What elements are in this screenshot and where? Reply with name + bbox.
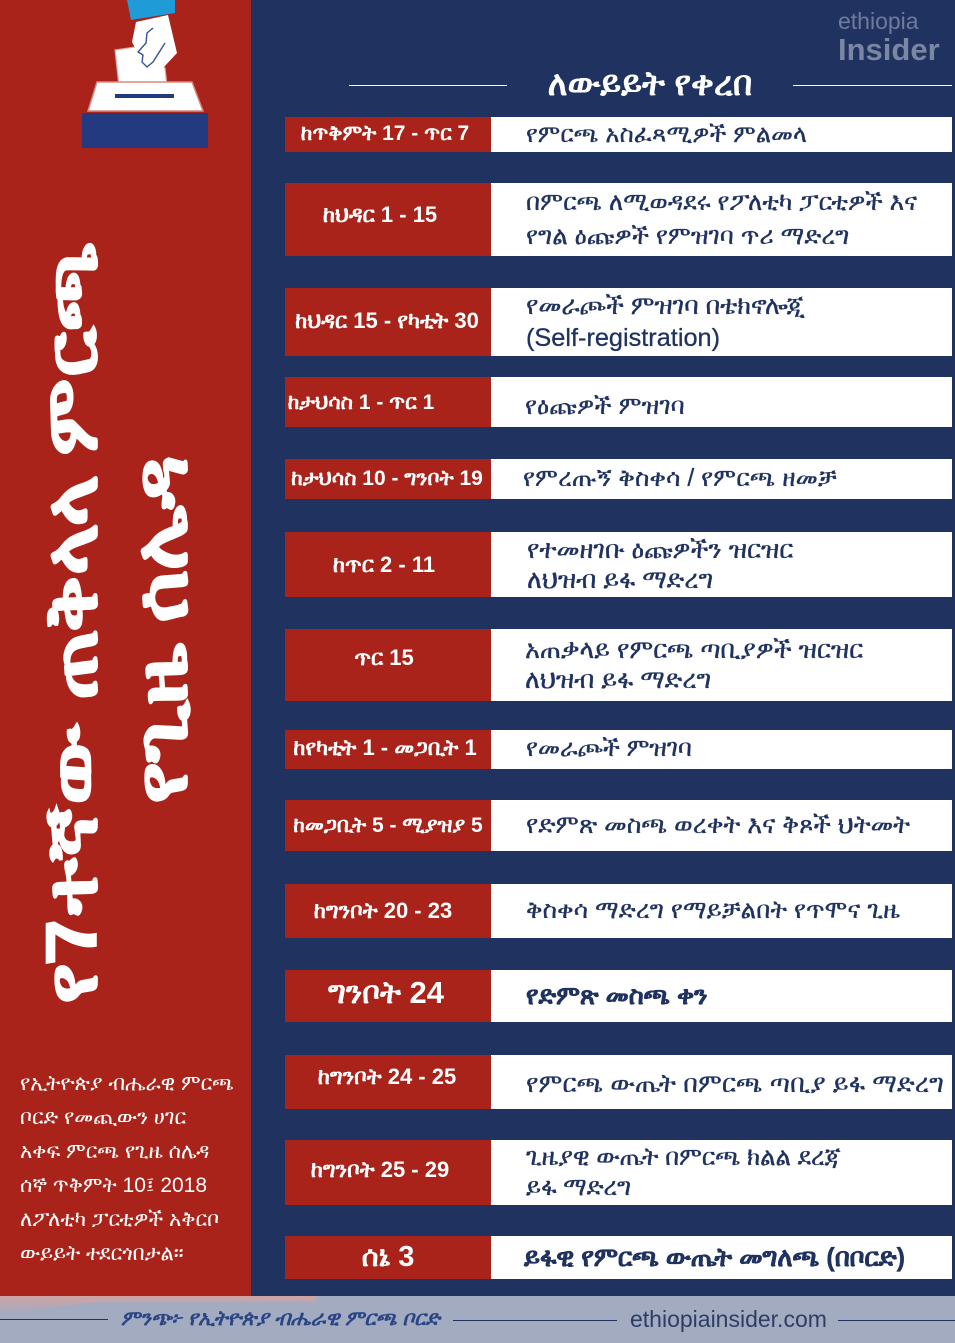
row 1: የምርጫ አስፈጻሚዎች ምልመላ	[526, 120, 807, 148]
row 3: (Self-registration)	[526, 324, 720, 352]
logo: ethiopia Insider: Insider	[838, 32, 940, 67]
row 1: ከጥቅምት 17 - ጥር 7	[301, 122, 469, 144]
row 7: አጠቃላይ የምርጫ ጣቢያዎች ዝርዝር	[525, 636, 863, 664]
footer	[0, 1296, 955, 1343]
row 6: የተመዘገቡ ዕጩዎችን ዝርዝር	[527, 536, 793, 564]
logo: ethiopia Insider	[838, 8, 940, 67]
row 14: ይፋዊ የምርጫ ውጤት መግለጫ (በቦርድ)	[524, 1244, 905, 1272]
row 4	[285, 377, 952, 427]
row 3: ከህዳር 15 - የካቲት 30	[295, 308, 479, 333]
row 5: የምረጡኝ ቅስቀሳ / የምርጫ ዘመቻ	[523, 465, 837, 492]
source text: ምንጭ፦ የኢትዮጵያ ብሔራዊ ምርጫ ቦርድ	[121, 1307, 440, 1330]
row 14: ሰኔ 3	[362, 1241, 414, 1273]
row 2: የግል ዕጩዎች የምዝገባ ጥሪ ማድረግ	[526, 222, 849, 250]
row 3	[285, 288, 952, 356]
row 10	[285, 884, 952, 938]
row 8	[285, 730, 952, 769]
text block: intro: አቀፍ ምርጫ የጊዜ ሰሌዳ	[20, 1140, 209, 1163]
row 4: ከታህሳስ 1 - ጥር 1	[288, 391, 434, 414]
row 8: የመራጮች ምዝገባ	[526, 734, 692, 762]
row 9: ከመጋቢት 5 - ሚያዝያ 5	[293, 814, 483, 836]
row 4: የዕጩዎች ምዝገባ	[525, 393, 685, 420]
row 10: ከግንቦት 20 - 23	[314, 898, 452, 923]
row 11	[285, 970, 952, 1022]
row 7: ጥር 15	[354, 645, 414, 670]
row 2: በምርጫ ለሚወዳደሩ የፖለቲካ ፓርቲዎች እና	[526, 188, 917, 216]
website: ethiopiainsider.com	[630, 1306, 827, 1332]
icon: hand casting ballot into box	[82, 0, 208, 148]
row 6: ለህዝብ ይፋ ማድረግ	[527, 566, 713, 594]
panel: red sidebar	[0, 0, 251, 1296]
row 12: የምርጫ ውጤት በምርጫ ጣቢያ ይፋ ማድረግ	[526, 1070, 944, 1098]
row 9	[285, 800, 952, 851]
text block: intro: ሰኞ ጥቅምት 10፤ 2018	[20, 1174, 207, 1197]
row 13	[285, 1140, 952, 1205]
row 2: ከህዳር 1 - 15	[323, 202, 437, 226]
row 6	[285, 532, 952, 597]
row 9: የድምጽ መስጫ ወረቀት እና ቅጾች ህትመት	[526, 810, 910, 838]
row 7	[285, 629, 952, 701]
row 10: ቅስቀሳ ማድረግ የማይቻልበት የጥሞና ጊዜ	[526, 897, 900, 924]
row 1	[285, 117, 952, 152]
row 7: ለህዝብ ይፋ ማድረግ	[525, 666, 711, 694]
row 14	[285, 1236, 952, 1279]
title: line 1: የ7ተኛው ጠቅላላ ምርጫ	[32, 238, 112, 1010]
row 3: የመራጮች ምዝገባ በቴክኖሎጂ	[526, 292, 805, 320]
text block: intro	[20, 1072, 234, 1265]
row 2	[285, 183, 952, 256]
row 13: ይፋ ማድረግ	[526, 1174, 631, 1200]
title: line 2: የጊዜ ሰሌዳ	[122, 449, 202, 810]
row 13: ጊዜያዊ ውጤት በምርጫ ክልል ደረጃ	[526, 1144, 841, 1170]
text block: intro: ለፖለቲካ ፓርቲዎች አቅርቦ	[20, 1208, 219, 1231]
row 11: ግንቦት 24	[328, 974, 444, 1010]
text block: intro: የኢትዮጵያ ብሔራዊ ምርጫ	[20, 1072, 234, 1095]
row 13: ከግንቦት 25 - 29	[311, 1156, 449, 1182]
row 12	[285, 1055, 952, 1109]
row 5: ከታህሳስ 10 - ግንቦት 19	[291, 467, 483, 490]
row 11: የድምጽ መስጫ ቀን	[526, 982, 708, 1010]
heading: ለውይይት የቀረበ	[548, 65, 752, 103]
row 8: ከየካቲት 1 - መጋቢት 1	[293, 734, 477, 760]
text block: intro: ውይይት ተደርጎበታል።	[20, 1242, 184, 1265]
logo: ethiopia Insider: ethiopia	[838, 8, 919, 34]
row 5	[285, 459, 952, 499]
row 6: ከጥር 2 - 11	[333, 552, 435, 576]
text block: intro: ቦርድ የመጪውን ሀገር	[20, 1106, 186, 1129]
row 12: ከግንቦት 24 - 25	[318, 1064, 456, 1089]
